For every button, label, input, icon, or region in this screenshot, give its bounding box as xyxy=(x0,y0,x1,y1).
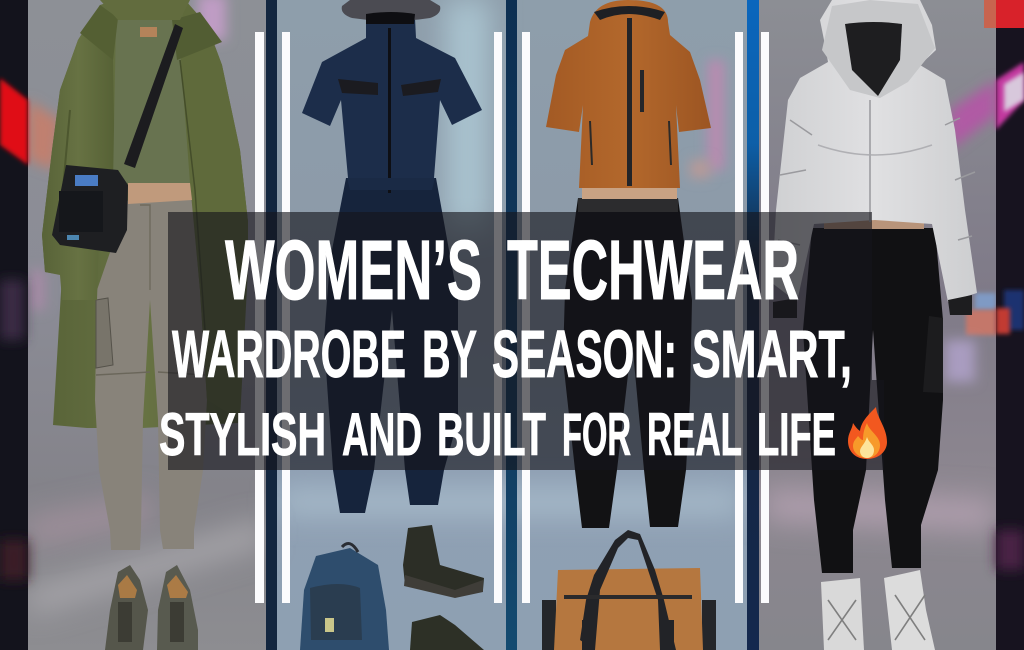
white lace-up boots xyxy=(821,570,935,650)
title line 2: SEASON: xyxy=(492,317,677,392)
title line 3 xyxy=(159,401,836,468)
title line 3: STYLISH xyxy=(159,401,326,468)
title line 3: AND xyxy=(342,401,422,468)
translucent title band xyxy=(168,212,884,470)
outfit 3: rust shell jacket, black joggers and holdall xyxy=(542,0,716,650)
outfit 1: olive parka and khaki cargo pants xyxy=(42,0,248,650)
trail shoes xyxy=(105,565,198,650)
black cargo joggers xyxy=(563,198,692,528)
skin midriff xyxy=(128,183,192,204)
chunky sandal xyxy=(403,525,484,598)
left dark edge with red sign xyxy=(0,0,28,650)
black neck gaiter xyxy=(845,22,902,96)
crossbody strap xyxy=(124,24,183,168)
skin midriff xyxy=(582,186,677,199)
white puffer jacket xyxy=(772,0,977,302)
rust jacket xyxy=(546,0,711,188)
chest pocket flaps xyxy=(338,79,378,95)
navy jumpsuit upper xyxy=(302,18,482,178)
title line 1: WOMEN’S xyxy=(225,223,482,317)
title line 1: TECHWEAR xyxy=(507,223,799,317)
black cuffs xyxy=(773,295,972,318)
neon light tubes xyxy=(255,32,769,603)
solar crossbody bag xyxy=(52,165,128,253)
title line 2: SMART, xyxy=(692,317,852,392)
right dark edge with neon signs xyxy=(996,0,1024,650)
navy jumpsuit trousers xyxy=(324,178,458,513)
khaki cargo pants xyxy=(95,200,207,550)
title line 2: WARDROBE xyxy=(172,317,406,392)
outfit 4: white puffer, black joggers and white boots xyxy=(772,0,977,650)
knit top xyxy=(113,20,190,183)
outfit 2: navy jumpsuit, hat, backpack and sandals xyxy=(300,0,484,650)
title xyxy=(159,223,852,468)
olive parka xyxy=(42,0,248,428)
wide brim hat xyxy=(342,0,440,24)
jogger cargo pocket xyxy=(923,316,943,393)
title line 3: LIFE xyxy=(757,401,836,468)
dark column dividers xyxy=(266,0,759,650)
title line 2 xyxy=(172,317,852,392)
title line 3: REAL xyxy=(647,401,742,468)
denim backpack xyxy=(300,543,389,650)
skin midriff xyxy=(824,218,924,229)
title line 2: BY xyxy=(422,317,477,392)
coat front panels xyxy=(42,5,115,300)
title line 3: BUILT xyxy=(437,401,546,468)
black joggers xyxy=(803,228,943,573)
icon: fire xyxy=(848,407,887,459)
tan holdall bag xyxy=(542,530,716,650)
title line 3: FOR xyxy=(562,401,631,468)
second sandal xyxy=(410,615,484,650)
